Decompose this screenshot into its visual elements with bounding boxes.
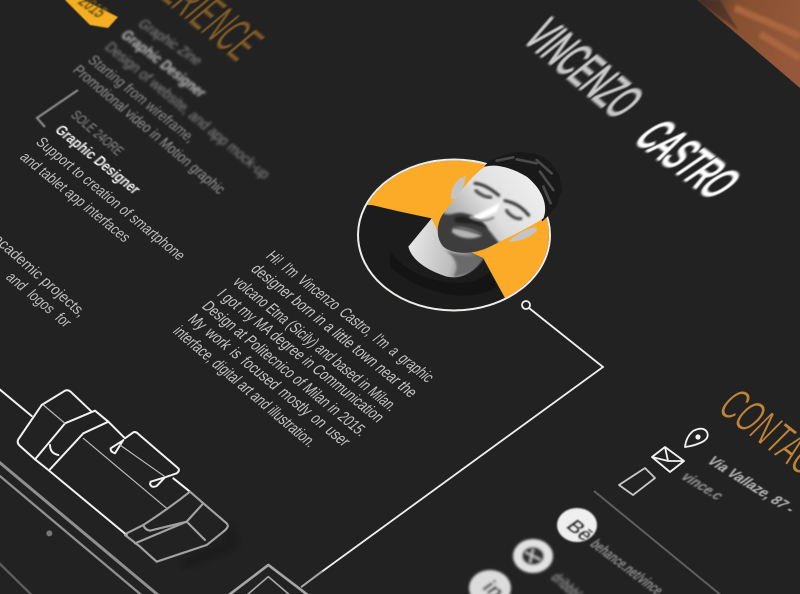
job: Graphic Zine description: Starting from wireframe, xyxy=(84,52,199,145)
about text: My work is focused mostly on user xyxy=(184,310,355,449)
icon: location pin xyxy=(685,429,708,447)
job: academic projects xyxy=(0,231,90,330)
job: Graphic Zine: Design of website, and app mock-up xyxy=(101,39,274,182)
portrait xyxy=(357,152,562,312)
name heading: VINCENZO xyxy=(513,9,655,127)
portrait: hair xyxy=(484,152,562,222)
portrait: face xyxy=(438,166,546,253)
job: Graphic Zine xyxy=(101,16,274,182)
job: Graphic Zine: Graphic Designer xyxy=(117,27,210,100)
about text: volcano Etna (Sicily) and based in Milan. xyxy=(229,273,402,414)
portrait: nose xyxy=(468,202,501,220)
device: shadow xyxy=(187,527,233,563)
badge: year xyxy=(65,0,118,28)
contact section xyxy=(469,380,800,594)
social: behance xyxy=(557,508,668,594)
device: thin inner lines xyxy=(43,405,167,508)
about text: Hi! I'm Vincenzo Castro, I'm a graphic xyxy=(262,247,439,385)
connector line with node xyxy=(320,301,603,573)
job: Graphic Zine: Graphic Zine xyxy=(134,16,207,68)
job: Sole 24 Ore: Support to creation of smartphone xyxy=(32,134,189,263)
social: dribbble xyxy=(513,539,607,594)
job: Sole 24 Ore xyxy=(16,107,189,263)
name heading: CASTRO xyxy=(623,112,753,207)
about text: interface, digital art and illustration. xyxy=(169,322,321,450)
about text: designer born in a little town near the xyxy=(247,260,422,400)
icon: phone xyxy=(619,468,655,495)
job: Sole 24 Ore: SOLE 24ORE xyxy=(67,107,127,158)
email text: vince.c xyxy=(677,470,728,502)
portrait: eyes and brows xyxy=(475,183,529,219)
name heading xyxy=(513,9,753,207)
about text: Design at Politecnico of Milan in 2015. xyxy=(198,297,372,439)
job: Sole 24 Ore: and tablet app interfaces xyxy=(16,149,135,245)
about text xyxy=(169,247,439,450)
social: behance: Bē xyxy=(561,516,599,545)
portrait: moustache and lips xyxy=(455,216,487,228)
device: base block xyxy=(125,492,228,562)
device: bottom peak xyxy=(227,565,322,594)
icon: envelope xyxy=(652,447,684,472)
bracket xyxy=(37,90,78,127)
portrait: disc, sweater and neck xyxy=(359,160,549,310)
wood desk corner xyxy=(697,0,800,88)
device: lid strap and hinge xyxy=(0,388,190,535)
illustration: device outline xyxy=(0,388,322,594)
job: academic projects: and logos for xyxy=(2,269,76,330)
portrait: ring xyxy=(358,160,550,310)
device: page frame lines xyxy=(0,460,160,594)
job: Graphic Zine description: Promotional video in Motion graphic xyxy=(69,62,229,197)
portrait: beard xyxy=(435,212,500,255)
job: Sole 24 Ore: Graphic Designer xyxy=(51,122,144,197)
divider xyxy=(594,491,722,594)
portrait: head xyxy=(438,152,562,253)
social: linkedin xyxy=(469,570,511,594)
about text: I got my MA degree in Communication xyxy=(213,285,389,425)
portrait: ears xyxy=(451,176,537,242)
experience section xyxy=(0,0,275,330)
